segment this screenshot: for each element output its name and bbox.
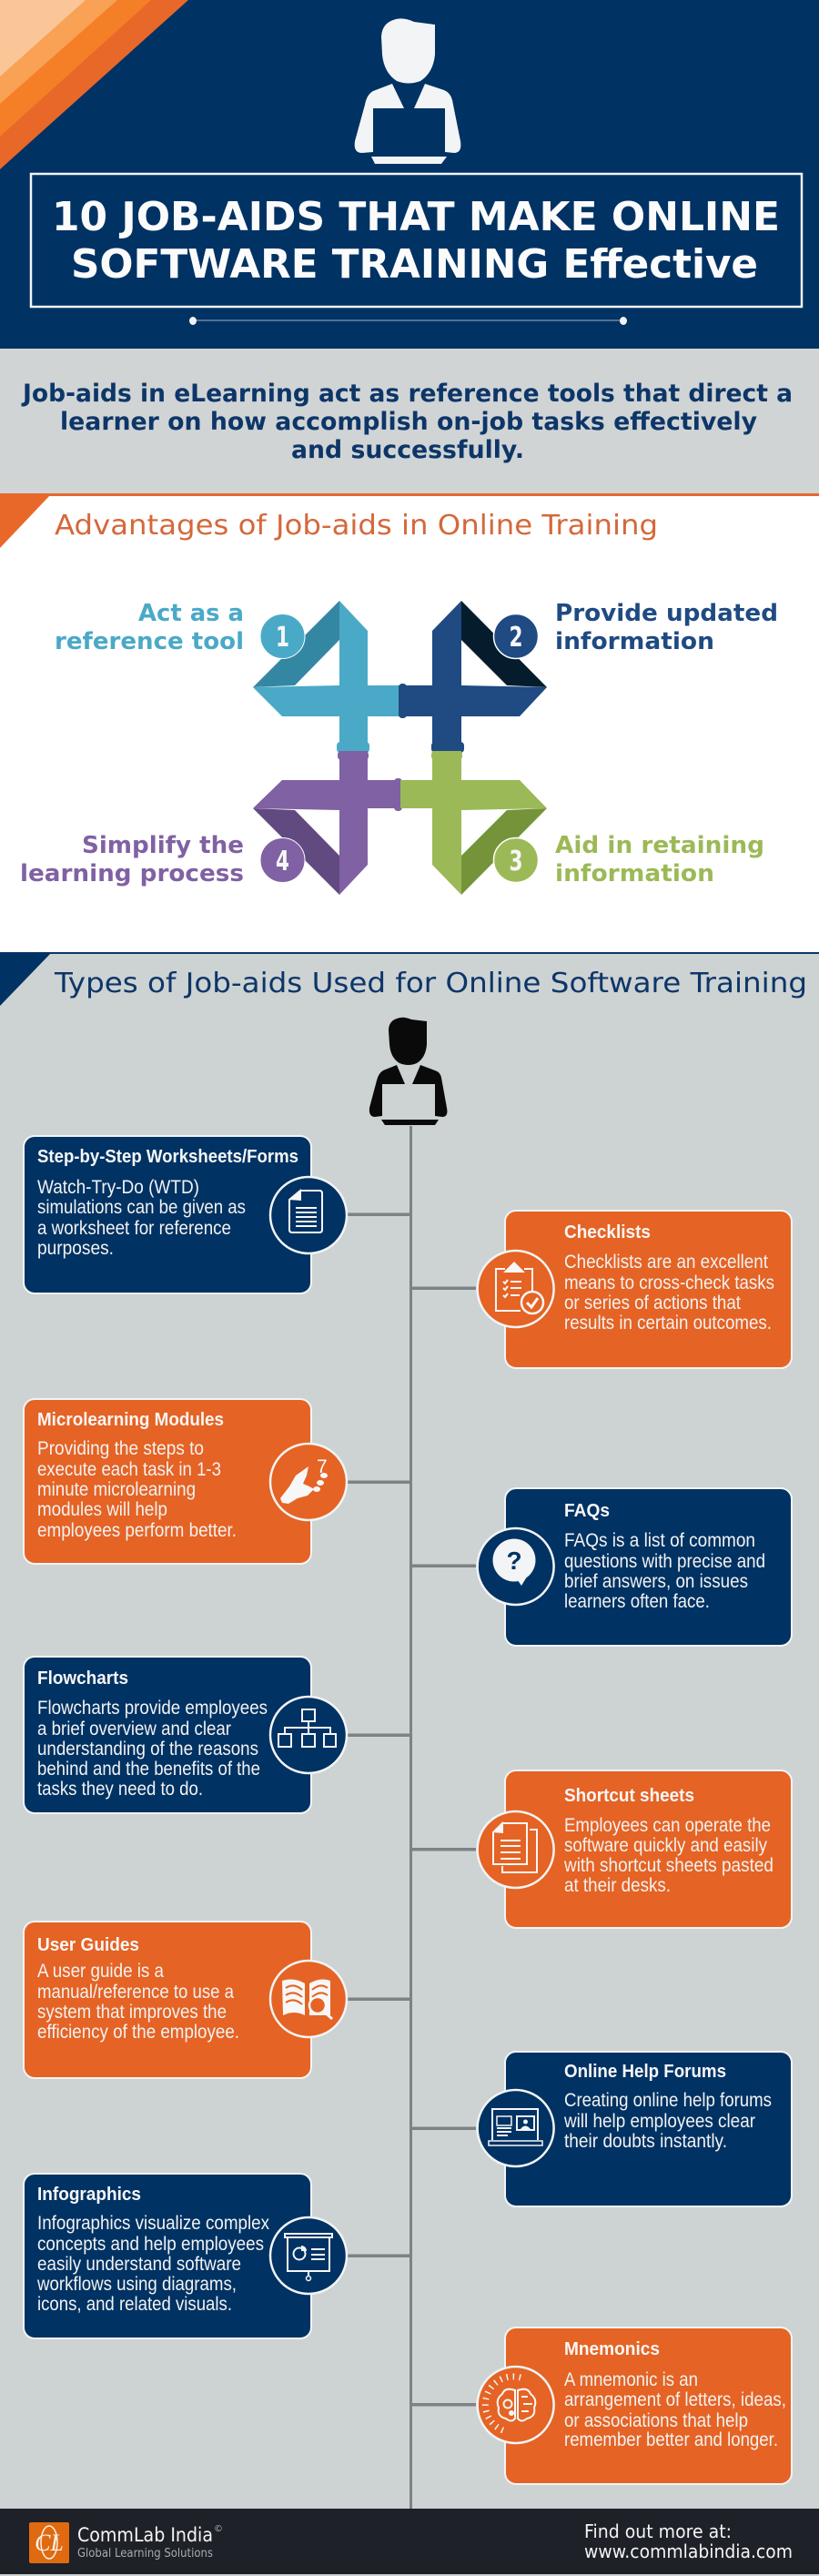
body text bbox=[37, 1438, 237, 1541]
arrow 4: purple bbox=[253, 751, 402, 895]
body text: modules will help bbox=[37, 1499, 167, 1520]
body text: system that improves the bbox=[37, 2002, 227, 2023]
body text bbox=[564, 2369, 786, 2450]
body text: purposes. bbox=[37, 1238, 114, 1259]
icon: question bubble bbox=[478, 1528, 554, 1605]
intro text: and successfully. bbox=[291, 436, 524, 464]
label: simplify the learning process bbox=[20, 832, 244, 887]
intro text: learner on how accomplish on-job tasks effectively bbox=[60, 408, 757, 436]
intro text: Job-aids in eLearning act as reference tools that direct a bbox=[21, 380, 793, 408]
icon: person at laptop bbox=[355, 18, 460, 164]
heading: advantages: Advantages of Job-aids in Online Training bbox=[55, 510, 658, 542]
card: mnemonics bbox=[412, 2328, 792, 2484]
connector bbox=[348, 2254, 410, 2257]
body text bbox=[37, 1961, 239, 2043]
website callout: www.commlabindia.com bbox=[584, 2541, 793, 2562]
card: infographics bbox=[24, 2174, 410, 2338]
label: simplify the learning process: Simplify the bbox=[82, 832, 244, 859]
logo bbox=[29, 2522, 69, 2563]
badge 4: 4 bbox=[276, 846, 289, 877]
title: 10 JOB-AIDS THAT MAKE ONLINE bbox=[52, 194, 780, 240]
connector bbox=[412, 2126, 476, 2130]
card: user guides: User Guides bbox=[37, 1934, 139, 1955]
body text: efficiency of the employee. bbox=[37, 2022, 239, 2043]
panel: types of job-aids bbox=[0, 952, 819, 2509]
body text bbox=[37, 1177, 246, 1259]
icon: brain with gears bbox=[478, 2367, 554, 2443]
icon: flowchart bbox=[270, 1697, 347, 1773]
body text: Watch-Try-Do (WTD) bbox=[37, 1177, 199, 1198]
corner triangle: orange bbox=[0, 494, 51, 548]
connector bbox=[348, 1733, 410, 1737]
header banner bbox=[0, 0, 819, 349]
body text: a brief overview and clear bbox=[37, 1719, 231, 1739]
body text: A mnemonic is an bbox=[564, 2369, 698, 2390]
label: aid in retaining information bbox=[555, 832, 764, 887]
body text: or series of actions that bbox=[564, 1293, 741, 1313]
label: act as a reference tool bbox=[55, 600, 244, 655]
corner stripes bbox=[0, 0, 188, 169]
label: act as a reference tool: Act as a bbox=[138, 600, 244, 627]
connector bbox=[412, 1848, 476, 1851]
body text: concepts and help employees bbox=[37, 2234, 264, 2255]
icon: dark person at laptop bbox=[369, 1018, 447, 1125]
body text: learners often face. bbox=[564, 1591, 710, 1612]
arrow diagram bbox=[253, 601, 547, 895]
intro band bbox=[0, 349, 819, 494]
arrow 2: navy bbox=[399, 601, 547, 753]
icon: laptop forum bbox=[478, 2090, 554, 2166]
card: shortcut sheets: Shortcut sheets bbox=[564, 1785, 694, 1806]
label: simplify the learning process: learning process bbox=[20, 860, 244, 887]
intro text bbox=[21, 380, 793, 464]
card: faqs bbox=[412, 1488, 792, 1646]
body text: FAQs is a list of common bbox=[564, 1530, 755, 1551]
body text: employees perform better. bbox=[37, 1520, 237, 1541]
card: infographics: Infographics bbox=[37, 2184, 141, 2205]
label: provide updated information bbox=[555, 600, 778, 655]
connector bbox=[412, 1287, 476, 1290]
arrow 3: green bbox=[400, 751, 547, 895]
body text: Checklists are an excellent bbox=[564, 1252, 768, 1273]
badge 1 bbox=[260, 614, 305, 659]
body text: a worksheet for reference bbox=[37, 1218, 231, 1239]
body text: execute each task in 1-3 bbox=[37, 1459, 221, 1480]
card: online help forums bbox=[412, 2052, 792, 2206]
card: microlearning modules: Microlearning Modules bbox=[37, 1409, 224, 1430]
body text: Employees can operate the bbox=[564, 1815, 771, 1836]
label: aid in retaining information: Aid in retaining bbox=[555, 832, 764, 859]
icon: presentation board bbox=[270, 2217, 347, 2294]
card: checklists bbox=[412, 1211, 792, 1368]
card: user guides bbox=[24, 1922, 410, 2078]
icon: stacked sheets bbox=[478, 1811, 554, 1888]
body text: arrangement of letters, ideas, bbox=[564, 2389, 786, 2410]
card: flowcharts: Flowcharts bbox=[37, 1668, 128, 1689]
label: act as a reference tool: reference tool bbox=[55, 628, 244, 655]
body text: or associations that help bbox=[564, 2410, 748, 2431]
body text: with shortcut sheets pasted bbox=[563, 1855, 774, 1876]
icon: hand with number bbox=[270, 1444, 347, 1520]
brand name: © bbox=[214, 2524, 223, 2534]
body text: simulations can be given as bbox=[37, 1197, 246, 1218]
body text: will help employees clear bbox=[563, 2111, 755, 2132]
card: checklists: Checklists bbox=[564, 1222, 651, 1242]
badge 1: 1 bbox=[276, 622, 289, 654]
body text: results in certain outcomes. bbox=[564, 1313, 772, 1334]
connector bbox=[412, 2403, 476, 2407]
footer bbox=[0, 2509, 819, 2574]
badge 2: 2 bbox=[510, 622, 522, 654]
body text bbox=[563, 1815, 774, 1896]
body text bbox=[36, 2213, 269, 2315]
body text: easily understand software bbox=[37, 2254, 241, 2275]
logo: CL bbox=[35, 2530, 64, 2556]
label: provide updated information: Provide updated bbox=[555, 600, 778, 627]
badge 2 bbox=[493, 614, 539, 659]
body text: means to cross-check tasks bbox=[564, 1273, 774, 1293]
body text: behind and the benefits of the bbox=[37, 1759, 260, 1780]
body text: remember better and longer. bbox=[564, 2429, 778, 2450]
body text: tasks they need to do. bbox=[37, 1779, 203, 1800]
brand name bbox=[77, 2524, 223, 2561]
brand name: CommLab India bbox=[77, 2524, 213, 2546]
card: faqs: FAQs bbox=[564, 1500, 610, 1521]
icon: hand with number: 7 bbox=[317, 1456, 328, 1477]
card: shortcut sheets bbox=[412, 1770, 792, 1928]
connector bbox=[348, 1212, 410, 1216]
arrow 1: teal bbox=[253, 601, 400, 753]
body text: at their desks. bbox=[564, 1875, 671, 1896]
body text: Flowcharts provide employees bbox=[37, 1698, 268, 1719]
body text: Infographics visualize complex bbox=[37, 2213, 269, 2234]
body text: manual/reference to use a bbox=[37, 1982, 234, 2003]
body text bbox=[37, 1698, 268, 1800]
body text: brief answers, on issues bbox=[564, 1571, 748, 1592]
body text: minute microlearning bbox=[37, 1479, 196, 1500]
icon: document bbox=[270, 1177, 347, 1253]
website callout: Find out more at: bbox=[584, 2520, 732, 2542]
icon: clipboard with check bbox=[478, 1251, 554, 1327]
body text: A user guide is a bbox=[37, 1961, 164, 1982]
connector bbox=[348, 1997, 410, 2001]
icon: book with magnifier bbox=[270, 1961, 347, 2037]
connector bbox=[348, 1480, 410, 1484]
title underline ornament bbox=[189, 317, 627, 325]
title: SOFTWARE TRAINING Effective bbox=[71, 241, 758, 288]
title frame bbox=[31, 174, 802, 307]
title bbox=[52, 194, 780, 288]
body text: software quickly and easily bbox=[564, 1835, 767, 1856]
card: flowcharts bbox=[24, 1657, 410, 1813]
icon: question bubble: ? bbox=[506, 1547, 522, 1575]
timeline spine bbox=[410, 1126, 412, 2509]
heading: types: Types of Job-aids Used for Online Software Training bbox=[54, 968, 807, 999]
badge 3 bbox=[493, 837, 539, 883]
website callout bbox=[584, 2520, 793, 2562]
connector bbox=[412, 1564, 476, 1567]
card: step-by-step worksheets: Step-by-Step Worksheets/Forms bbox=[37, 1146, 298, 1167]
badge 3: 3 bbox=[510, 846, 522, 877]
label: aid in retaining information: information bbox=[555, 860, 714, 887]
label: provide updated information: information bbox=[555, 628, 714, 655]
corner triangle: navy bbox=[0, 953, 51, 1006]
body text: icons, and related visuals. bbox=[37, 2294, 232, 2315]
body text: questions with precise and bbox=[564, 1551, 765, 1572]
card: online help forums: Online Help Forums bbox=[564, 2061, 726, 2082]
body text: their doubts instantly. bbox=[564, 2131, 727, 2152]
body text: workflows using diagrams, bbox=[36, 2274, 237, 2295]
card: step-by-step worksheets bbox=[24, 1136, 410, 1293]
panel: advantages bbox=[0, 493, 819, 952]
body text: understanding of the reasons bbox=[37, 1739, 258, 1760]
card: mnemonics: Mnemonics bbox=[564, 2338, 660, 2359]
card: microlearning modules bbox=[24, 1399, 410, 1564]
brand name: Global Learning Solutions bbox=[77, 2547, 213, 2561]
badge 4 bbox=[260, 837, 305, 883]
body text: Creating online help forums bbox=[564, 2090, 772, 2111]
body text bbox=[563, 2090, 772, 2152]
body text bbox=[564, 1252, 774, 1334]
body text bbox=[564, 1530, 765, 1612]
body text: Providing the steps to bbox=[37, 1438, 204, 1459]
